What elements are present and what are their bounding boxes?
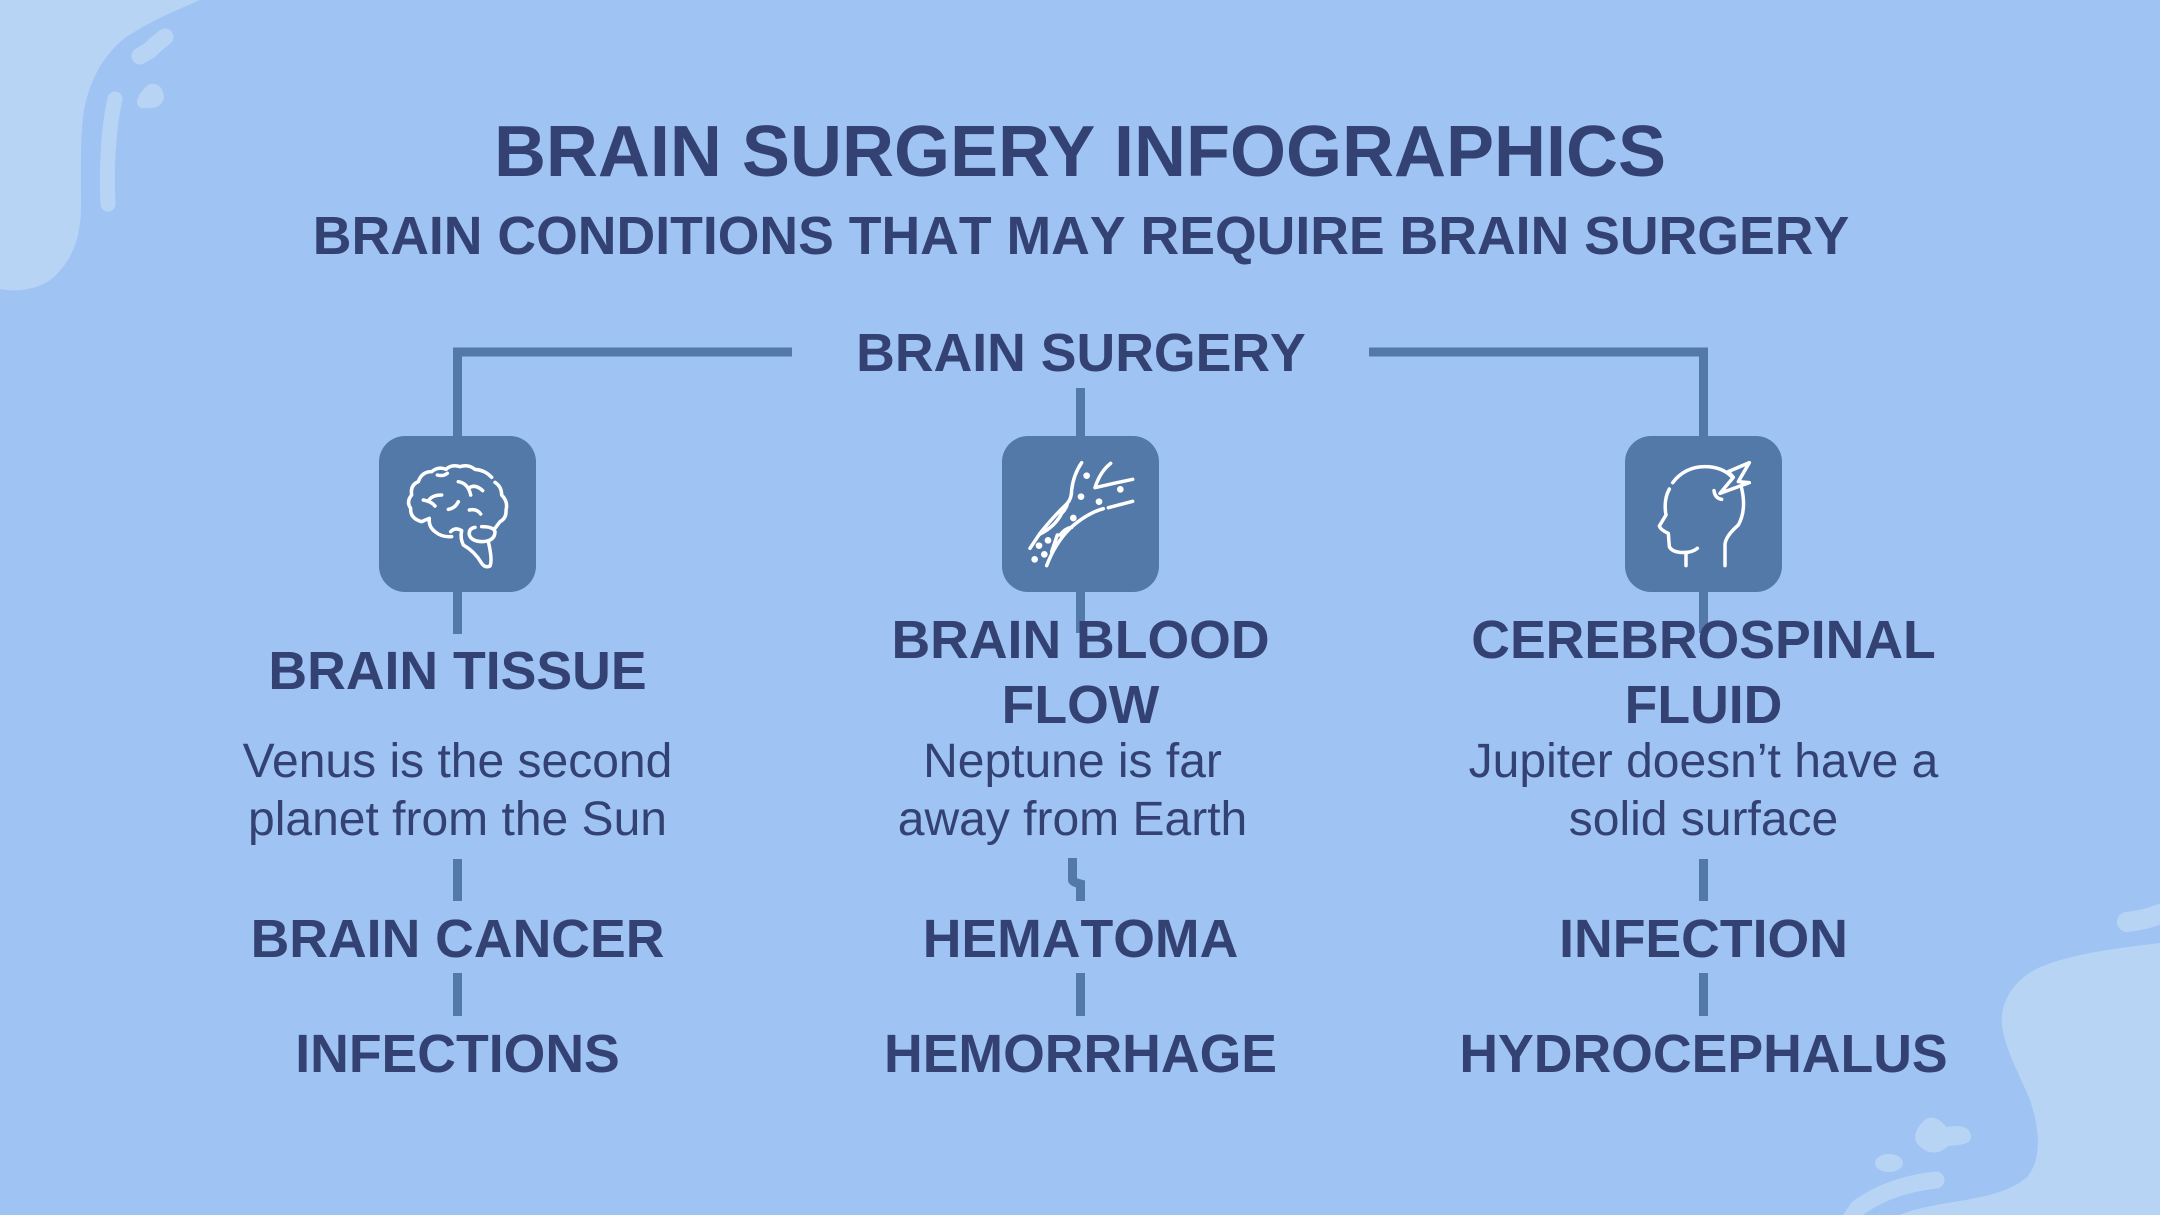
- decorative blob: bottom right: [1850, 914, 2160, 1215]
- description: planet from the Sun: [248, 793, 667, 846]
- heading: CEREBROSPINAL: [1471, 610, 1936, 670]
- item: infections: INFECTIONS: [295, 1024, 620, 1084]
- description: Neptune is far: [923, 735, 1222, 788]
- central heading: BRAIN SURGERY: [856, 323, 1306, 383]
- column 2: brain blood flow: [884, 610, 1277, 1084]
- heading: BRAIN TISSUE: [268, 641, 647, 701]
- icon: brain: [379, 436, 536, 592]
- icon: head with lightning: [1625, 436, 1782, 592]
- item: brain cancer: BRAIN CANCER: [251, 909, 664, 969]
- description: away from Earth: [898, 793, 1247, 846]
- description: solid surface: [1569, 793, 1838, 846]
- item: hemorrhage: HEMORRHAGE: [884, 1024, 1277, 1084]
- item: hematoma: HEMATOMA: [923, 909, 1238, 969]
- column 1: brain tissue: [243, 641, 672, 1084]
- heading: FLOW: [1002, 675, 1160, 735]
- decorative blob: top left: [0, 0, 200, 290]
- item: infection: INFECTION: [1559, 909, 1848, 969]
- column 3: cerebrospinal fluid: [1459, 610, 1948, 1084]
- description: Venus is the second: [243, 735, 672, 788]
- icon: blood vessel: [1002, 436, 1159, 592]
- item: hydrocephalus: HYDROCEPHALUS: [1459, 1024, 1948, 1084]
- title: BRAIN SURGERY INFOGRAPHICS: [494, 112, 1666, 192]
- subtitle: BRAIN CONDITIONS THAT MAY REQUIRE BRAIN SURGERY: [313, 206, 1849, 266]
- heading: BRAIN BLOOD: [891, 610, 1270, 670]
- heading: FLUID: [1625, 675, 1782, 735]
- description: Jupiter doesn’t have a: [1469, 735, 1939, 788]
- connector tree: [458, 352, 1704, 1016]
